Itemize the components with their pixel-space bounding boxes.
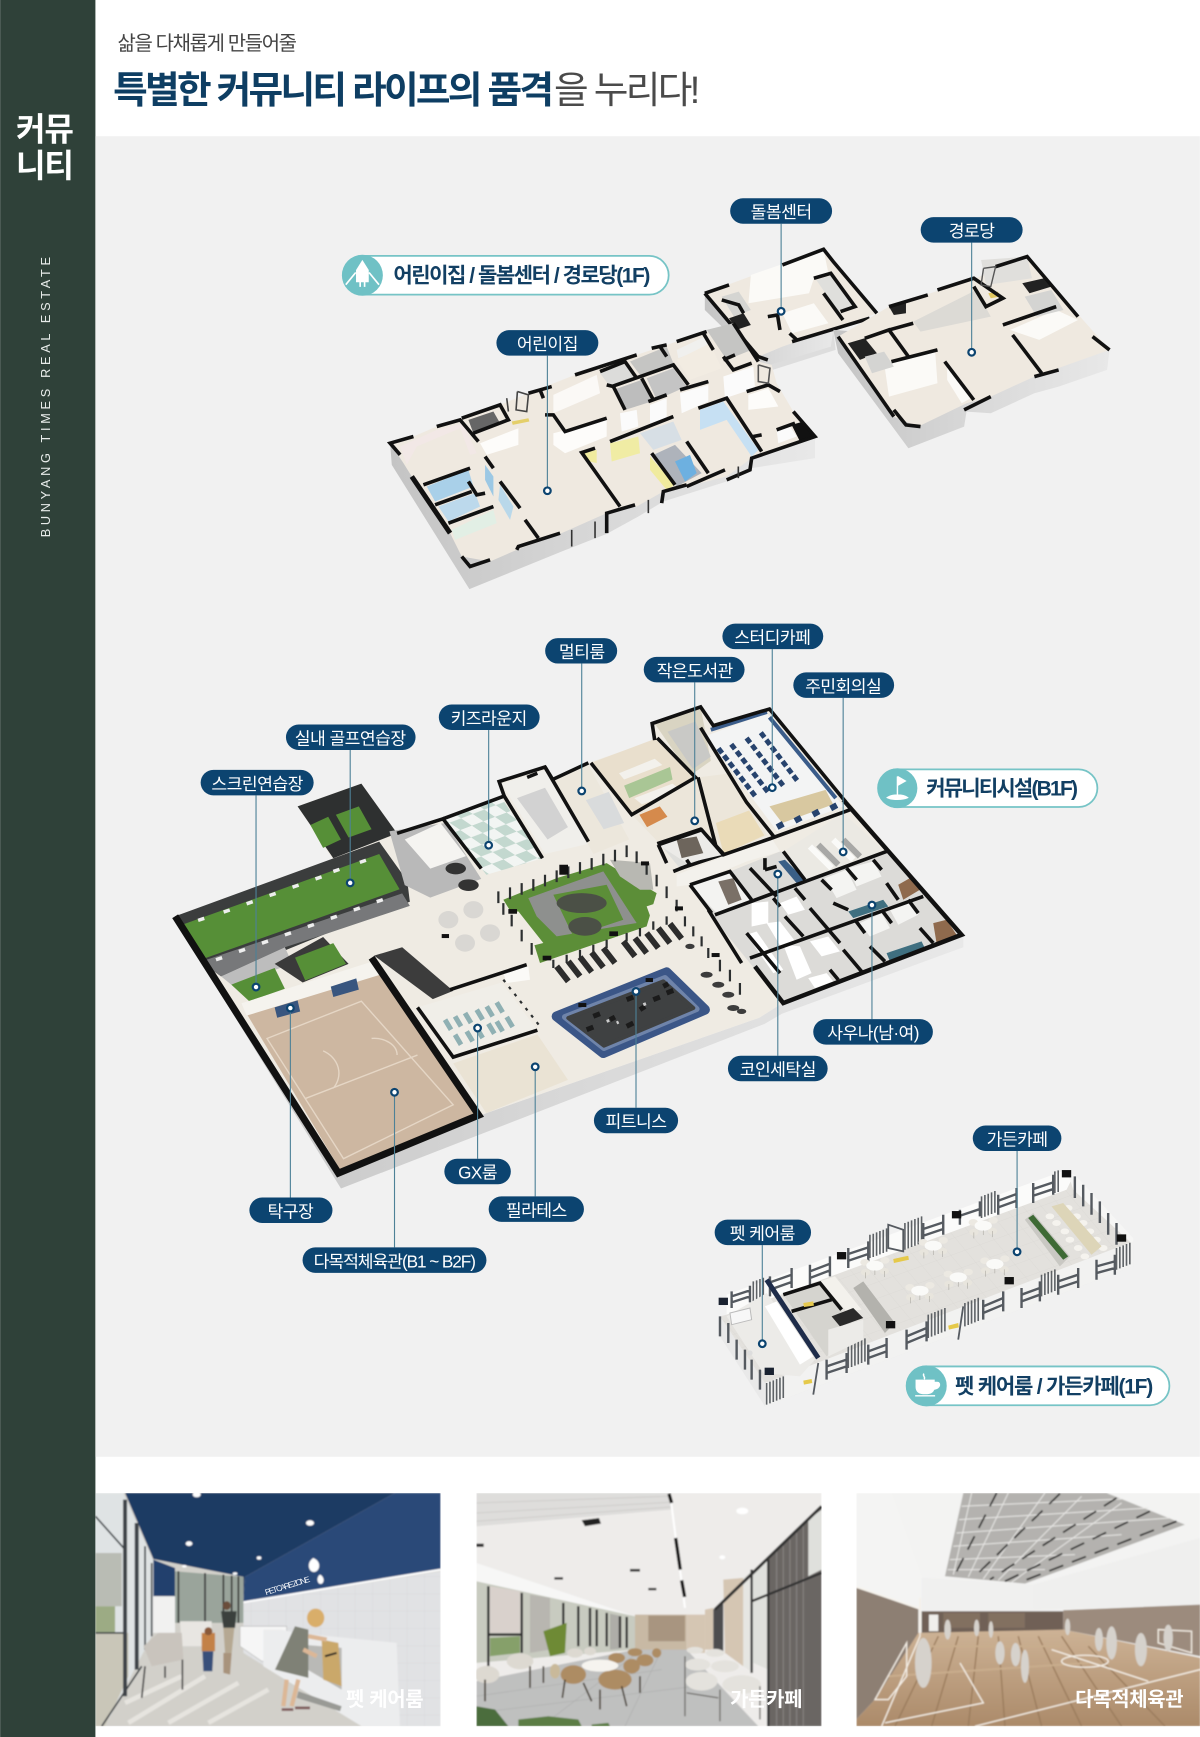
white fixtures: [752, 901, 768, 926]
label: 코인세탁실: 코인세탁실: [740, 1060, 816, 1080]
label: 탁구장: [249, 1005, 332, 1223]
sidebar: 니티: [16, 148, 73, 184]
badge: nursery, care center, senior hall: 어린이집 / 돌봄센터 / 경로당(1F): [393, 263, 650, 287]
label: 스크린연습장: 스크린연습장: [211, 774, 304, 794]
photo: multipurpose gym: [856, 1493, 1200, 1726]
badge: community facilities: 커뮤니티시설(B1F): [926, 776, 1078, 800]
treadmills: [557, 924, 682, 981]
base: [720, 1241, 1133, 1406]
lounge tables: [438, 901, 500, 952]
gym wall and pillars: [442, 861, 746, 1045]
back wall: [727, 1170, 1073, 1315]
pools: [848, 900, 888, 918]
label: 작은도서관: 작은도서관: [657, 661, 734, 681]
curtains: [753, 1170, 1130, 1405]
label: 다목적체육관: [303, 1089, 486, 1273]
grey plan panel: [95, 136, 1200, 1457]
tiled floor: [720, 1176, 1133, 1383]
wing floor: [390, 323, 815, 561]
pet care room: [727, 1280, 818, 1376]
caption: 다목적체육관: [1075, 1688, 1183, 1711]
locker rooms: [658, 830, 723, 863]
main title: 특별한 커뮤니티 라이프의 품격: [113, 69, 554, 111]
label: GX룸: GX룸: [458, 1163, 497, 1183]
photo: pet care room: [95, 1492, 441, 1726]
icon: paw: [309, 1558, 324, 1584]
library and study rooms: [591, 707, 846, 869]
window frames: [720, 1175, 1117, 1395]
label: 어린이집: 어린이집: [517, 334, 578, 354]
label: 펫 케어룸: [715, 1220, 811, 1347]
badge: community facilities: [877, 768, 1097, 808]
label: 돌봄센터: [730, 198, 832, 315]
label: 피트니스: 피트니스: [606, 1112, 666, 1132]
label: 돌봄센터: 돌봄센터: [751, 202, 812, 222]
wing base: [390, 437, 815, 589]
walls: [390, 323, 815, 566]
sidebar: [0, 0, 95, 1737]
label: 필라테스: [489, 1063, 584, 1222]
caption: 펫 케어룸: [346, 1688, 423, 1711]
badge: nursery, care center, senior hall: [342, 255, 669, 296]
multipurpose gym: [175, 916, 479, 1173]
label: 어린이집: [496, 330, 598, 494]
caption: 가든카페: [730, 1688, 802, 1711]
icon: slide tower: [346, 261, 379, 287]
floor slab: [175, 707, 963, 1173]
meeting room: [783, 813, 885, 880]
photo: garden cafe: [474, 1493, 822, 1726]
front wall: [765, 1241, 1133, 1406]
label: 키즈라운지: 키즈라운지: [451, 708, 527, 728]
floor plan: community facilities (B1F): [175, 707, 963, 1188]
label: 주민회의실: 주민회의실: [805, 676, 881, 696]
service rooms: [783, 1276, 895, 1356]
cafe furniture: [719, 1170, 1126, 1385]
floor plan: care center and senior hall wings (1F): [705, 249, 1110, 448]
B1F: sauna and meeting room block: [658, 800, 962, 1003]
garden: [498, 845, 740, 995]
label: GX룸: [444, 1025, 511, 1184]
sidebar title: 커뮤: [16, 112, 73, 148]
sidebar vertical text: BUNYANG TIMES REAL ESTATE: [38, 257, 53, 537]
sauna walls: [658, 800, 962, 1003]
badge: pet care and garden cafe: [906, 1365, 1169, 1406]
label: 키즈라운지: [439, 705, 540, 849]
icon: golf flag: [887, 777, 907, 799]
label: 실내 골프연습장: 실내 골프연습장: [295, 728, 406, 748]
weight machines: [685, 944, 746, 1014]
running track: [557, 972, 705, 1053]
base slab: [175, 916, 963, 1188]
badge: pet care and garden cafe: 펫 케어룸 / 가든카페(1F): [955, 1375, 1153, 1399]
icon: coffee cup: [915, 1374, 940, 1396]
label: 멀티룸: [545, 638, 617, 794]
sign text: PET CARE ZONE: [264, 1574, 312, 1597]
label: 실내 골프연습장: [286, 724, 416, 886]
label: 다목적체육관: 다목적체육관(B1 ~ B2F): [314, 1251, 475, 1271]
header: [113, 32, 700, 111]
label: 필라테스: 필라테스: [506, 1200, 567, 1220]
label: 가든카페: 가든카페: [987, 1129, 1048, 1149]
label: 사우나: [813, 902, 933, 1045]
GX room and pilates: [417, 983, 568, 1113]
label: 사우나: 사우나(남·여): [827, 1023, 919, 1043]
subtitle: 삶을 다채롭게 만들어줄: [118, 32, 297, 55]
label: 작은도서관: [644, 657, 745, 824]
label: 스크린연습장: [201, 770, 314, 990]
label: 탁구장: 탁구장: [268, 1201, 314, 1221]
label: 경로당: 경로당: [949, 221, 995, 241]
rooms: [400, 323, 815, 540]
label: 피트니스: [594, 988, 678, 1133]
label: 주민회의실: [793, 672, 894, 855]
kids lounge and lobby: [389, 763, 629, 898]
label: 코인세탁실: [728, 871, 828, 1081]
label: 펫 케어룸: 펫 케어룸: [730, 1224, 795, 1244]
brown rooms: [898, 878, 920, 900]
B1F: garden and fitness: [438, 845, 746, 1053]
right wing: [833, 257, 1110, 448]
label: 경로당: [921, 217, 1023, 356]
label: 가든카페: [973, 1126, 1061, 1255]
floor plan: pet care and garden cafe (1F): [719, 1170, 1133, 1406]
right wall: [1068, 1173, 1133, 1245]
golf practice rooms: [175, 784, 410, 1001]
label: 스터디카페: 스터디카페: [734, 628, 810, 648]
label: 멀티룸: 멀티룸: [559, 642, 605, 662]
floor plan: nursery wing (1F): [390, 323, 815, 589]
middle wing: [705, 249, 877, 370]
label: 스터디카페: [722, 624, 823, 791]
header: 을 누리다!: [554, 69, 700, 111]
GX mats: [445, 1002, 513, 1045]
